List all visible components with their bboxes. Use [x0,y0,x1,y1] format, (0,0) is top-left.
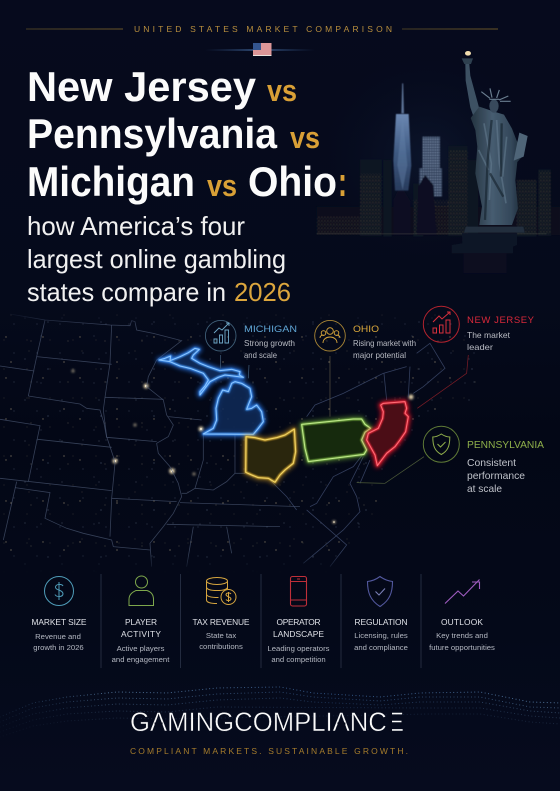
icon: dollar [44,576,74,606]
feature: regulation [354,576,408,652]
Statue of Liberty [452,51,528,273]
feature: outlook: OUTLOOK [441,617,483,627]
feature: regulation: and compliance [354,643,408,652]
title: Ohio [248,158,337,205]
callout: Pennsylvania: performance [467,470,525,482]
subtitle: states compare in [27,277,226,307]
icon: player [129,576,154,606]
icon: growth chart [205,320,236,351]
callout: Michigan: Strong growth [244,339,295,348]
state: Pennsylvania [302,419,371,462]
water reflections [317,232,547,235]
One World Trade tower [393,83,411,191]
feature: market size: MARKET SIZE [32,617,87,627]
icon: red chart [423,306,459,342]
feature: outlook: future opportunities [429,643,495,652]
title: Pennsylvania [27,110,278,157]
callout: Michigan [205,320,297,360]
feature: operator landscape: Leading operators [268,644,330,653]
map of US states [0,312,500,574]
feature: operator landscape: OPERATOR [276,617,320,627]
state: Michigan [159,348,263,434]
callout: New Jersey [423,306,535,352]
subtitle: largest online gambling [27,244,286,274]
callout: Ohio [315,320,416,360]
icon: shield check [368,576,392,606]
leader lines [221,355,468,483]
feature: tax revenue: contributions [199,642,243,651]
icon: people [315,320,345,351]
feature: tax revenue: TAX REVENUE [192,617,250,627]
night lights [0,312,500,574]
state: New Jersey [367,402,408,466]
feature: tax revenue: State tax [206,631,236,640]
tagline: COMPLIANT MARKETS. SUSTAINABLE GROWTH. [130,746,408,756]
feature: operator landscape: and competition [271,655,326,664]
feature: market size: Revenue and [35,632,81,641]
icon: coins [206,578,236,604]
callout: New Jersey: NEW JERSEY [467,315,535,326]
dotted wave decoration [0,687,560,737]
feature: outlook: Key trends and [436,631,488,640]
callout: New Jersey: The market [467,331,511,340]
title: vs [207,168,237,203]
callout: Ohio: major potential [353,351,406,360]
feature: player activity: PLAYER [125,617,157,627]
icon: US flag [205,43,315,56]
feature: regulation: REGULATION [354,617,408,627]
state borders west [0,314,300,567]
callout: Pennsylvania: at scale [467,483,502,495]
feature: market size [32,576,87,652]
skyline and statue photo [317,51,560,273]
callout: Pennsylvania [423,426,544,495]
callout: New Jersey: leader [467,343,493,352]
title: Michigan [27,158,195,205]
title: : [338,158,347,205]
icon: trend arrow [445,580,480,604]
feature: player activity: Active players [117,644,165,653]
callout: Pennsylvania: PENNSYLVANIA [467,440,544,451]
title: New Jersey [27,63,257,110]
feature: tax revenue [192,578,250,651]
title: vs [290,120,320,155]
subtitle [27,211,291,307]
callout: Michigan: MICHIGAN [244,324,297,335]
feature: player activity [112,576,170,664]
icon: phone [290,576,306,606]
state borders east [270,343,445,567]
title: vs [267,73,297,108]
callout: Ohio: Rising market with [353,339,416,348]
logo: GAMINGCOMPLIANCE [130,707,404,737]
header label: UNITED STATES MARKET COMPARISON [134,24,392,34]
icon: shield [423,426,459,462]
subtitle: 2026 [234,277,291,307]
bottom feature row [32,574,495,668]
callout: Ohio: OHIO [353,324,379,335]
feature: outlook [429,580,495,652]
state: Ohio [246,429,296,482]
feature: operator landscape: LANDSCAPE [273,629,324,639]
callout: Michigan: and scale [244,351,277,360]
feature: regulation: Licensing, rules [354,631,408,640]
feature: market size: growth in 2026 [33,643,84,652]
feature: operator landscape [268,576,330,664]
subtitle: how America’s four [27,211,245,241]
skyline buildings [317,137,560,237]
callout: Pennsylvania: Consistent [467,457,516,469]
feature: player activity: and engagement [112,655,170,664]
title [27,63,347,205]
feature: player activity: ACTIVITY [121,629,161,639]
